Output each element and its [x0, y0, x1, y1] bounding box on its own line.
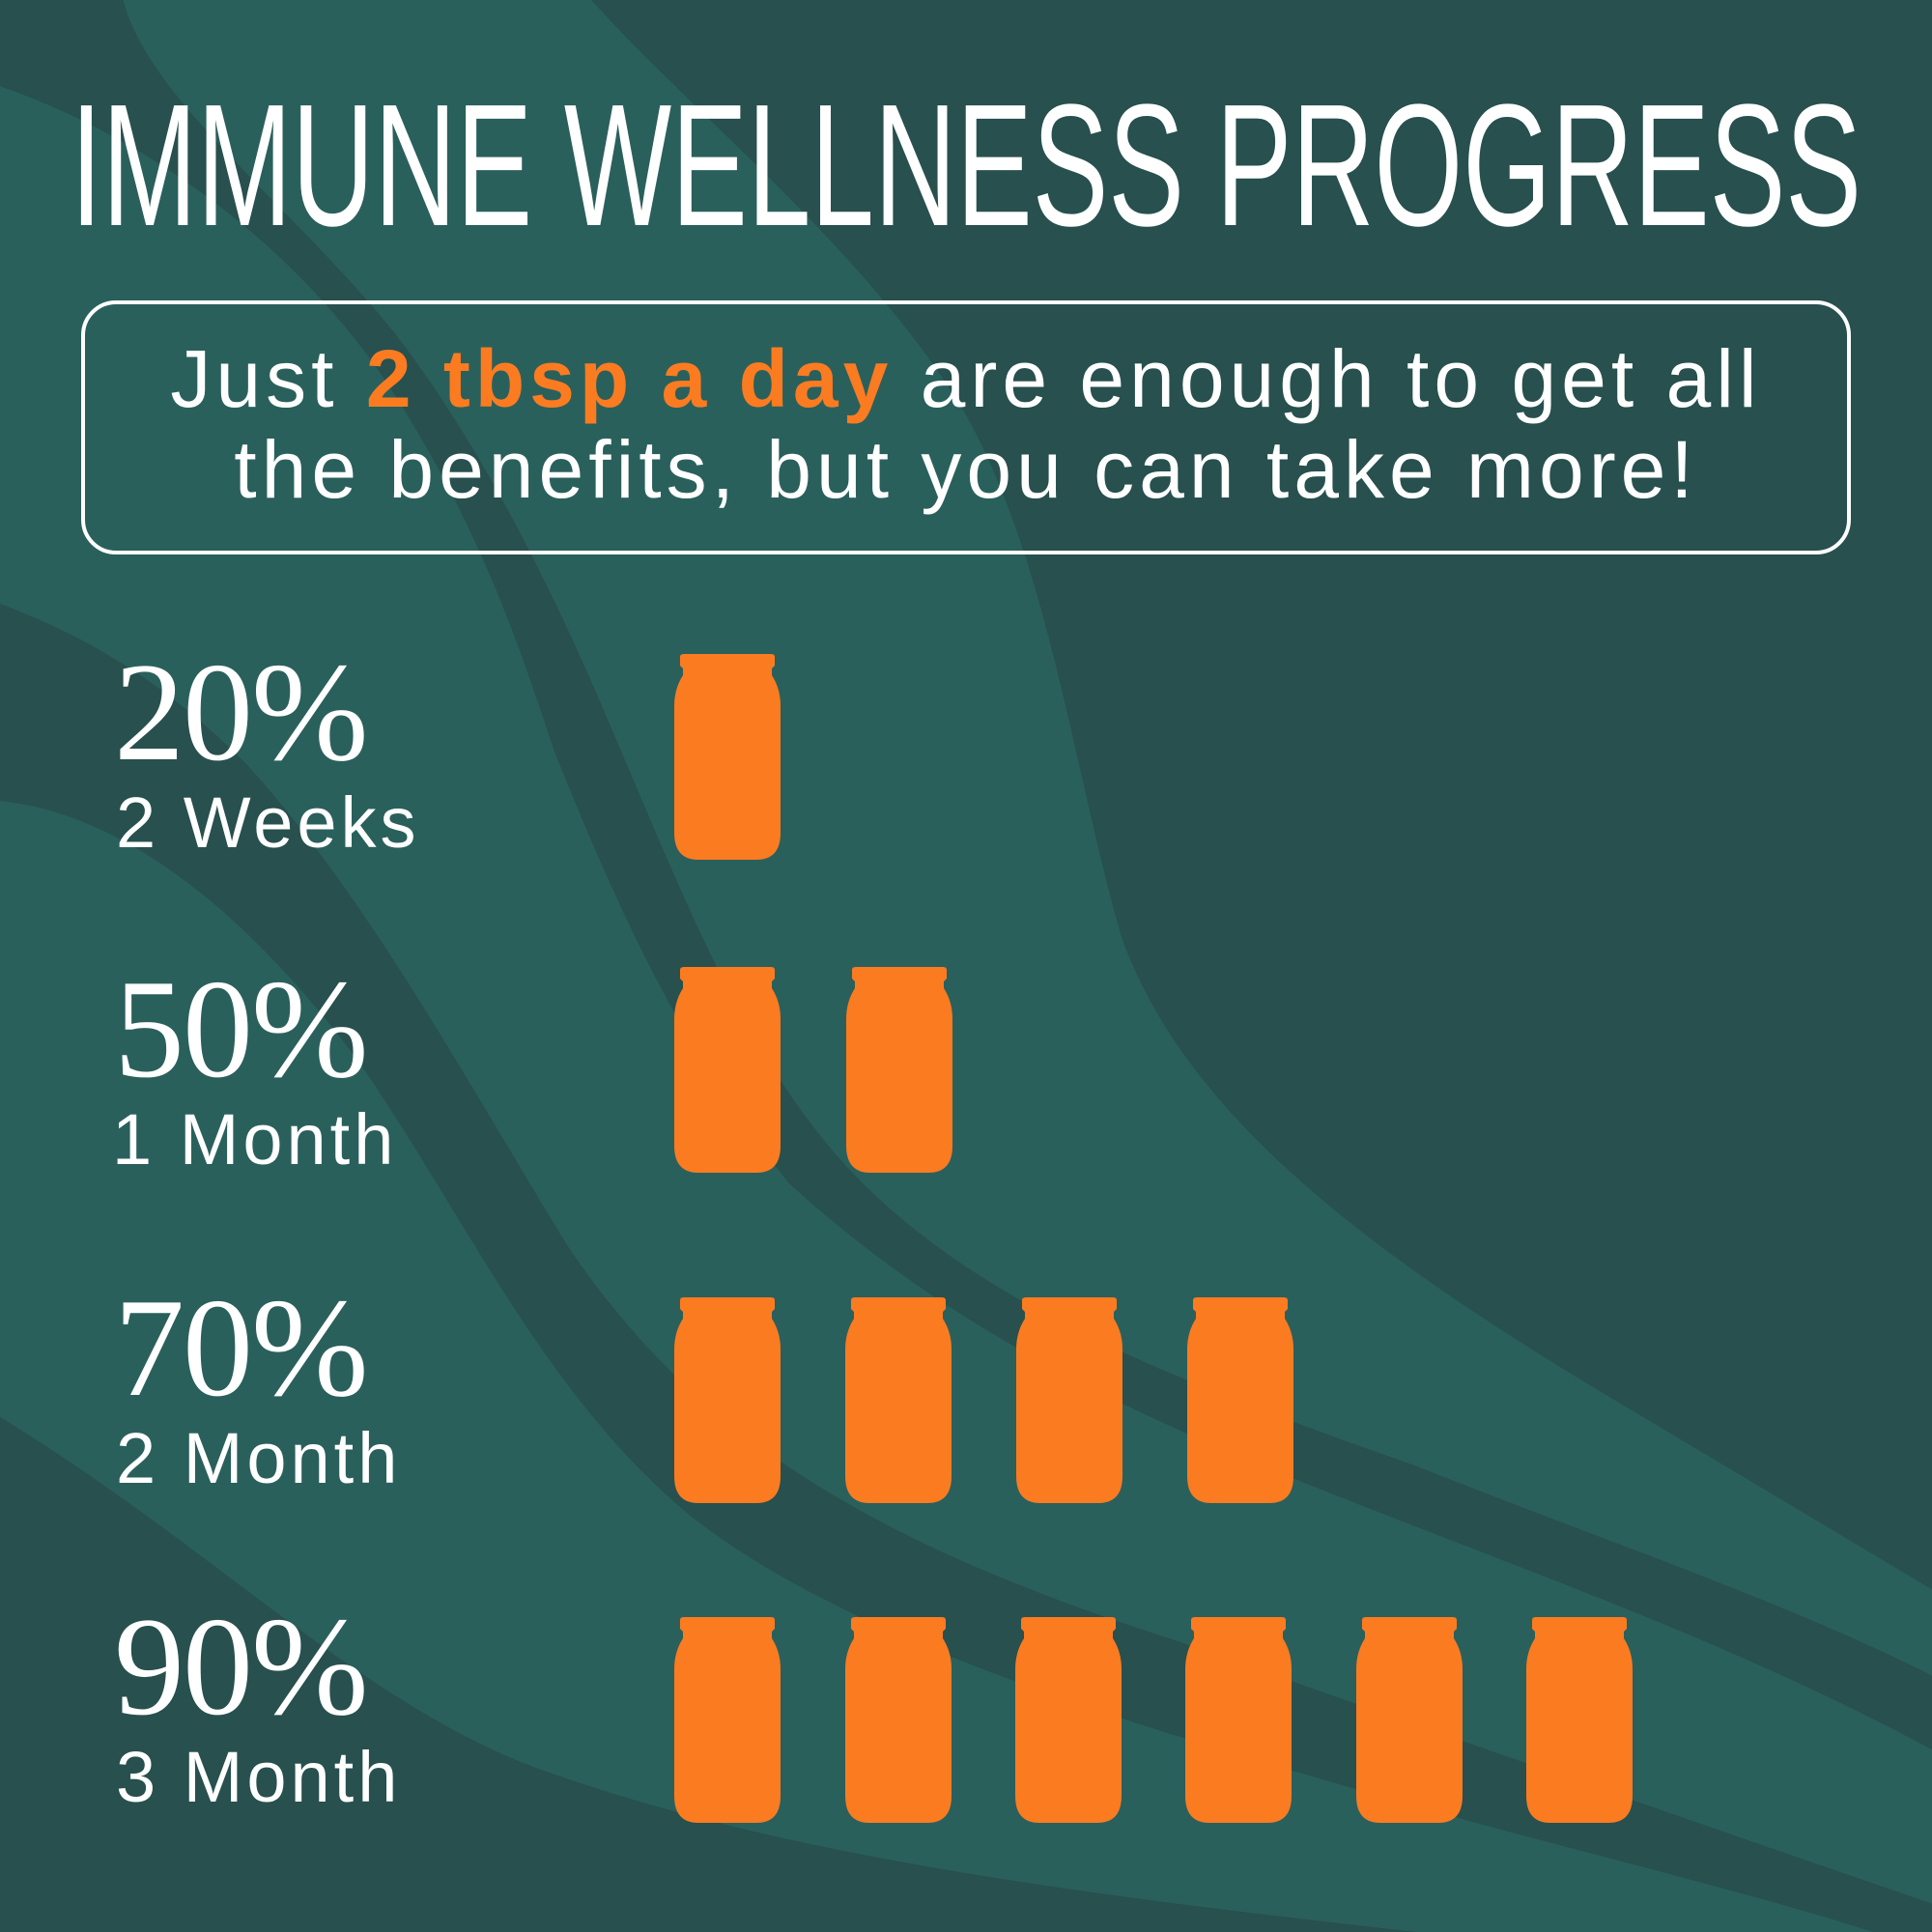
row 3 jars: [674, 1297, 1293, 1503]
row 4 label: [114, 1588, 401, 1817]
row 1 label: [114, 634, 420, 863]
row 1 label: 20%: [114, 634, 367, 790]
row 3 label: 2 Month: [116, 1418, 401, 1498]
callout box: [81, 300, 1851, 554]
row 1 jars: [674, 654, 781, 860]
title: IMMUNE WELLNESS PROGRESS: [71, 69, 1861, 263]
row 4 label: 90%: [114, 1588, 367, 1745]
row 4 label: 3 Month: [116, 1737, 401, 1817]
row 2 label: [112, 951, 397, 1179]
row 3 label: 70%: [114, 1269, 367, 1426]
callout box: Just 2 tbsp a day are enough to get all: [170, 333, 1762, 424]
row 4 jars: [674, 1617, 1633, 1823]
row 1 label: 2 Weeks: [116, 782, 420, 863]
callout box: the benefits, but you can take more!: [234, 424, 1698, 515]
row 3 label: [114, 1269, 401, 1498]
row 2 jars: [674, 967, 952, 1173]
row 2 label: 1 Month: [112, 1099, 397, 1179]
row 2 label: 50%: [114, 951, 367, 1107]
